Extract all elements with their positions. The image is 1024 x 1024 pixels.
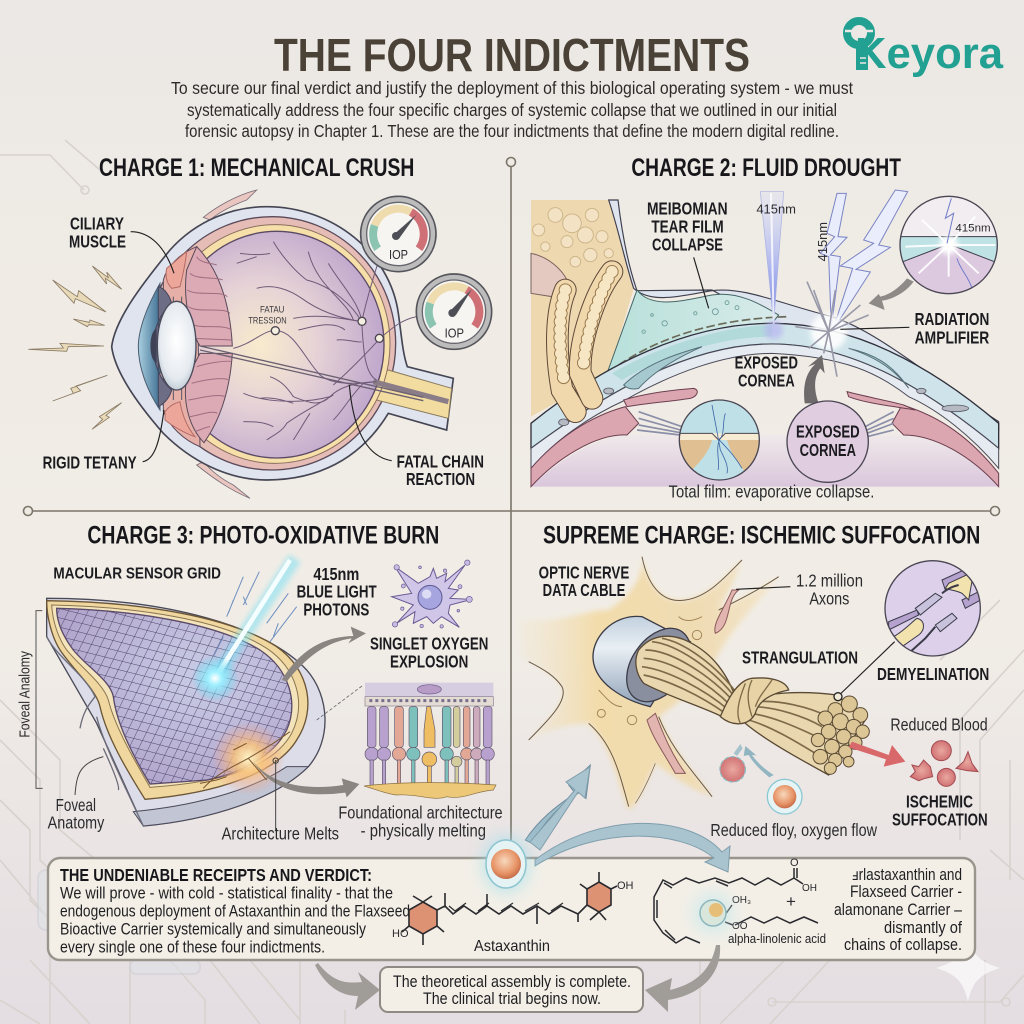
retinal vessels [233, 242, 417, 440]
chart: alpha-linolenic acid molecule: OO [732, 921, 748, 932]
label: axons: Axons [809, 588, 850, 608]
label: fatal tension: FATAU [260, 304, 285, 314]
panel: charge 1 mechanical crush [28, 155, 492, 498]
icon: red blood cells [910, 741, 978, 786]
body text: Bioactive Carrier systemically and simultaneously [60, 920, 366, 938]
label: fatal chain reaction: FATAL CHAIN [397, 451, 484, 471]
label: fatal tension: TRESSION [248, 315, 287, 325]
label: architecture melts: Architecture Melts [222, 823, 339, 843]
chart: alpha-linolenic acid molecule: O [790, 857, 799, 869]
icon: oxygen orbs with flow arrows [720, 744, 802, 814]
label: optic nerve data cable [539, 562, 629, 600]
label: 415nm rotated: 415nm [816, 222, 830, 261]
icon: 415nm beam and bolts [760, 190, 908, 377]
intro text [171, 78, 853, 141]
label: ischemic suffocation: SUFFOCATION [892, 810, 988, 830]
label: foveal anatomy: Foveal [56, 795, 96, 815]
arrow: acid to verdict right [645, 945, 720, 1012]
label: fatal chain reaction: REACTION [406, 469, 475, 489]
arrow: to singlet oxygen [282, 627, 366, 682]
label: fatal tension [248, 304, 287, 325]
arrow: blue up into nerve [525, 765, 590, 843]
icon: eye cross-section [112, 190, 453, 498]
panel: charge 2 fluid drought [531, 155, 999, 501]
text: right column: dismantly of [884, 919, 962, 937]
marker circles [271, 317, 383, 342]
label: radiation amplifier: AMPLIFIER [915, 327, 990, 347]
icon: photoreceptor cross-section [317, 683, 496, 798]
label: optic nerve data cable: DATA CABLE [543, 580, 625, 600]
label: 415nm: 415nm [756, 202, 796, 216]
icon: blue light beam [192, 558, 297, 702]
panel: charge 3 photo-oxidative burn [17, 522, 503, 843]
label: 415nm blue light photons: BLUE LIGHT [297, 582, 377, 602]
label: meibomian tear film collapse: COLLAPSE [652, 235, 723, 255]
label: fatal chain reaction [397, 451, 484, 489]
illustration: cornea section [531, 200, 999, 487]
label: singlet oxygen explosion: EXPLOSION [390, 652, 468, 672]
label: ischemic suffocation: ISCHEMIC [906, 791, 973, 811]
icon: carrier sphere [693, 893, 733, 933]
text: right column: ⅎrlastaxanthin and [852, 866, 962, 884]
label: radiation amplifier: RADIATION [915, 309, 989, 329]
arrow: exposed cornea up [804, 355, 825, 403]
icon: light bolts [28, 266, 122, 429]
chart: astaxanthin molecule: HO [392, 928, 409, 940]
callout: exposed cornea circle: CORNEA [800, 440, 856, 460]
body text: We will prove - with cold - statistical finality - that the [60, 884, 393, 902]
label: ciliary muscle: MUSCLE [69, 231, 126, 251]
icon: nerve tissue [519, 557, 779, 810]
label: optic nerve data cable: OPTIC NERVE [539, 562, 629, 582]
text: right column: chains of collapse. [844, 936, 962, 954]
intro text: To secure our final verdict and justify the deployment of this biological operating system - we must [171, 78, 853, 98]
label: macular sensor grid: MACULAR SENSOR GRID [53, 565, 221, 582]
label: meibomian tear film collapse [647, 199, 728, 255]
intro text: forensic autopsy in Chapter 1. These are the four indictments that define the modern digital redline. [185, 121, 839, 141]
logo: Keyora: Keyora [855, 29, 1004, 78]
label: strangulation: STRANGULATION [742, 647, 858, 667]
chart: alpha-linolenic acid molecule [654, 857, 818, 943]
divider lines [24, 158, 1000, 840]
callout: verdict: The clinical trial begins now. [423, 990, 601, 1008]
inset: demyelination [885, 561, 984, 656]
caption: total film: Total film: evaporative collapse. [669, 481, 874, 501]
callout: exposed cornea circle [787, 401, 868, 482]
leader lines [131, 232, 392, 462]
label: alpha-linolenic acid: alpha-linolenic acid [728, 931, 826, 946]
label: ciliary muscle: CILIARY [70, 213, 124, 233]
label: 415nm blue light photons: PHOTONS [303, 600, 369, 620]
text: right column: Flaxseed Carrier - [850, 883, 962, 901]
title: THE FOUR INDICTMENTS [274, 29, 750, 81]
heading: receipts: THE UNDENIABLE RECEIPTS AND VERDICT: [60, 865, 372, 885]
inset: ruptured film [679, 400, 762, 480]
icon: singlet oxygen burst [392, 560, 472, 628]
label: rigid tetany: RIGID TETANY [43, 452, 137, 472]
label: exposed cornea: EXPOSED [735, 352, 798, 372]
inset: radiation amplifier: 415nm [955, 222, 991, 234]
arrow: to foundational architecture [253, 762, 359, 797]
heading: charge 2: CHARGE 2: FLUID DROUGHT [631, 155, 901, 182]
arrow: inset to impact [869, 278, 914, 310]
gauge: IOP 2 [416, 274, 492, 349]
body text: endogenous deployment of Astaxanthin and the Flaxseed [60, 902, 410, 920]
label: meibomian tear film collapse: MEIBOMIAN [647, 199, 728, 219]
label: foveal analomy rotated: Foveal Analomy [17, 650, 33, 738]
gauge: IOP 2: IOP [445, 326, 464, 340]
callout: verdict [380, 967, 643, 1012]
heading: charge 1: CHARGE 1: MECHANICAL CRUSH [99, 155, 414, 182]
label: 415nm blue light photons: 415nm [313, 564, 359, 584]
label: reduced flow: Reduced floy, oxygen flow [710, 820, 877, 840]
leader lines [75, 757, 278, 830]
bracket: foveal anatomy [36, 611, 43, 788]
arrow: box to verdict left [315, 963, 380, 1010]
chart: alpha-linolenic acid molecule: OH₃ [732, 895, 751, 906]
text: right column [834, 866, 963, 954]
label: singlet oxygen explosion: SINGLET OXYGEN [370, 633, 488, 653]
arrow: reduced blood [849, 742, 905, 767]
icon: nerve cable [593, 616, 869, 775]
label: foundational architecture: Foundational architecture [338, 802, 503, 822]
panel: supreme charge ischemic suffocation [519, 522, 989, 843]
label: axons [796, 571, 863, 608]
label: astaxanthin: Astaxanthin [474, 938, 550, 955]
body text [60, 884, 410, 956]
label: exposed cornea [735, 352, 798, 391]
label: radiation amplifier [915, 309, 990, 347]
label: ischemic suffocation [892, 791, 988, 830]
panel: receipts and verdict [48, 857, 975, 960]
label: meibomian tear film collapse: TEAR FILM [651, 216, 724, 236]
gauge: IOP 1 [361, 196, 436, 272]
icon: meibomian glands [557, 272, 612, 412]
leader lines [694, 257, 909, 329]
heading: charge 3: CHARGE 3: PHOTO-OXIDATIVE BURN [87, 522, 439, 549]
text: right column: alamonane Carrier – [834, 901, 963, 919]
label: axons: 1.2 million [796, 571, 863, 591]
chart: alpha-linolenic acid molecule: OH [802, 883, 817, 894]
icon: macular sensor grid [43, 597, 325, 826]
body text: every single one of these four indictments. [60, 938, 325, 956]
intro text: systematically address the four specific charges of systemic collapse that we outlined in our initial [187, 100, 837, 120]
label: foveal anatomy [48, 795, 105, 832]
leader lines [736, 587, 895, 694]
chart: astaxanthin molecule [392, 872, 634, 945]
arrow: sphere to acid [535, 823, 730, 872]
callout: verdict: The theoretical assembly is complete. [393, 973, 631, 991]
arrow: from sphere to panel 4 [530, 767, 590, 850]
label: foveal anatomy: Anatomy [48, 812, 105, 832]
label: reduced blood: Reduced Blood [890, 715, 988, 735]
label: 415nm blue light photons [297, 564, 377, 620]
label: exposed cornea: CORNEA [738, 371, 795, 391]
icon: orange sphere [483, 836, 529, 892]
label: ciliary muscle [69, 213, 126, 251]
gauge: IOP 1: IOP [389, 248, 408, 262]
chart: astaxanthin molecule: OH [617, 880, 634, 892]
label: foundational architecture: - physically melting [361, 821, 486, 841]
inset: radiation amplifier [899, 195, 999, 294]
label: singlet oxygen explosion [370, 633, 488, 672]
callout: exposed cornea circle: EXPOSED [796, 422, 860, 442]
label: demyelination: DEMYELINATION [877, 664, 989, 684]
chart: alpha-linolenic acid molecule: + [786, 892, 796, 911]
label: foundational architecture [338, 802, 503, 841]
